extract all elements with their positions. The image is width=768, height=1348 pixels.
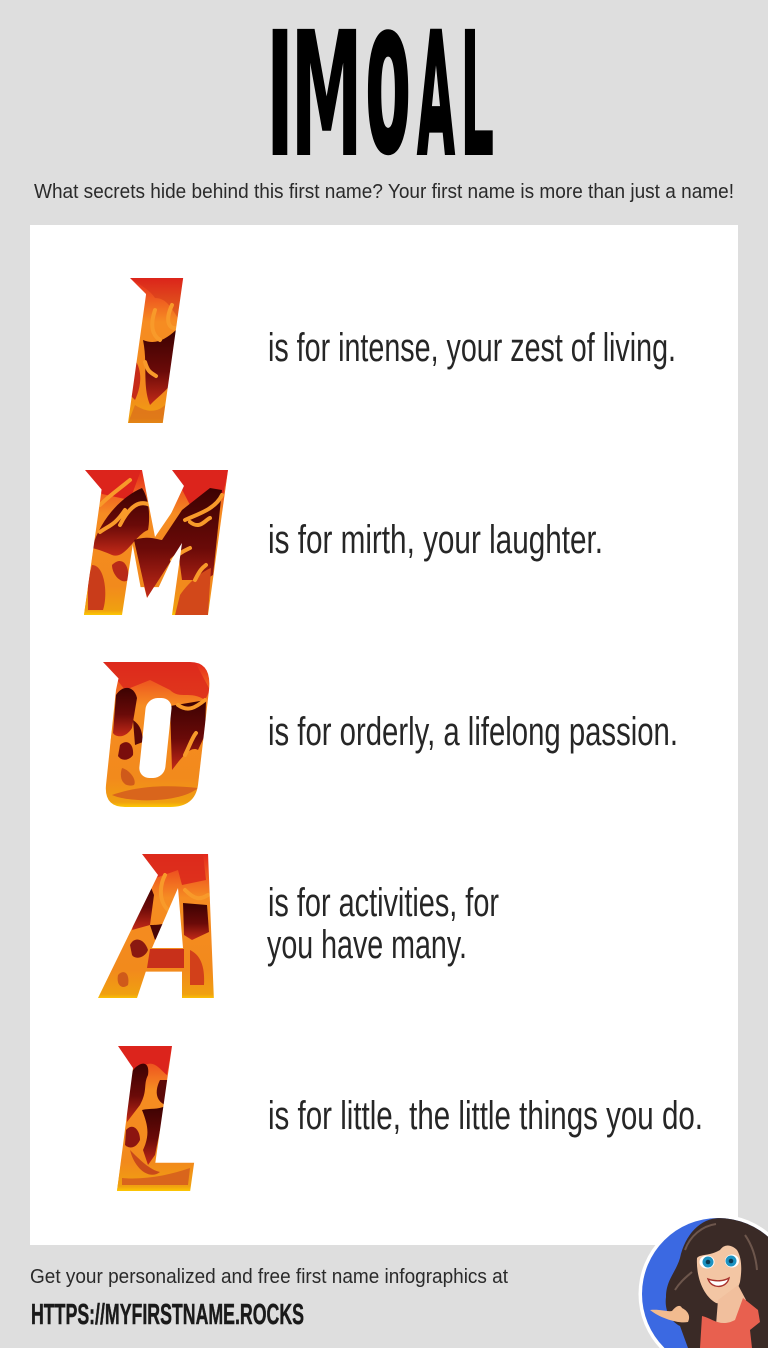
title: O [367,4,409,202]
title: L [460,0,494,197]
text: letter A meaning [267,881,499,967]
flame letter A [95,854,217,1000]
subtitle: What secrets hide behind this first name? Your first name is more than just a name! [34,181,734,203]
footer text: Get your personalized and free first name infographics at [30,1266,508,1288]
flame letter L [117,1046,194,1191]
avatar [638,1214,768,1348]
title: M [290,0,363,197]
flame letter O [100,662,212,808]
title: A [417,0,455,194]
title [266,0,494,202]
panel: white card [30,225,738,1245]
letter counter [138,698,173,778]
letter counter [152,888,183,948]
flame letter M [80,470,230,616]
text: letter A meaning: you have many. [267,923,467,967]
flame letter I [128,278,184,423]
text: letter A meaning: is for activities, for [268,881,499,925]
footer url: HTTPS://MYFIRSTNAME.ROCKS [31,1299,304,1331]
text: letter M meaning: is for mirth, your laughter. [268,518,603,562]
